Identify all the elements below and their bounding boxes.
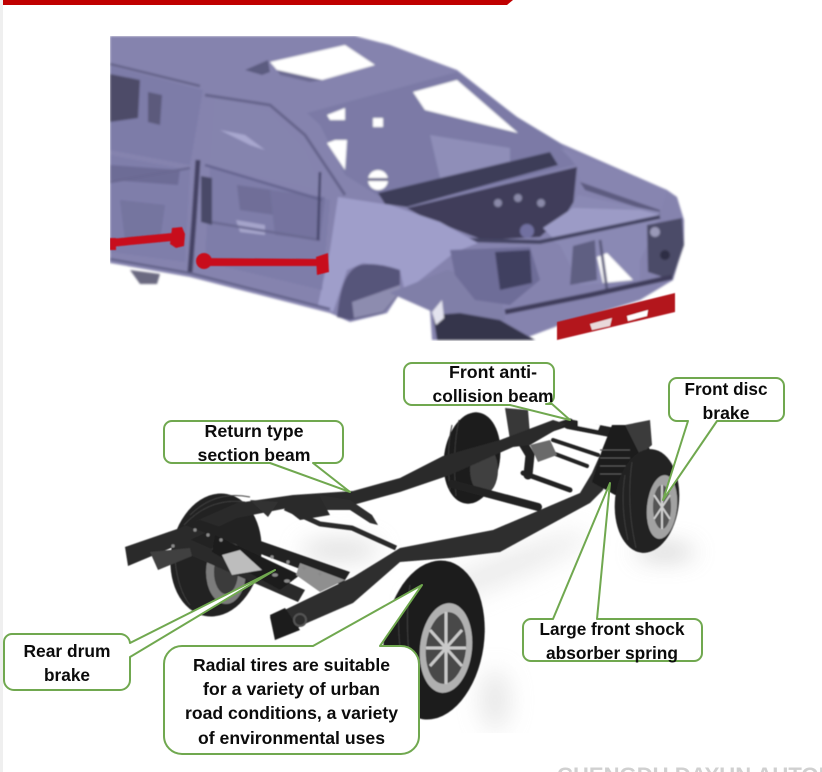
front radiator rail bbox=[465, 217, 660, 242]
callout: front disc brake: brake bbox=[702, 403, 750, 423]
front suspension and spring bbox=[592, 425, 650, 495]
callout: front disc brake: Front disc bbox=[684, 379, 768, 399]
left page edge bbox=[0, 0, 3, 772]
door panels bbox=[110, 155, 190, 262]
front end lower structure bbox=[392, 282, 432, 312]
callout: large front shock absorber spring: Large front shock bbox=[540, 619, 685, 639]
callout: rear drum brake: Rear drum bbox=[24, 641, 110, 661]
callout: radial tires: Radial tires are suitable bbox=[193, 655, 390, 675]
callout: large front shock absorber spring bbox=[523, 483, 702, 663]
rear spring arm bbox=[285, 508, 396, 548]
callout: front disc brake bbox=[663, 378, 784, 500]
sunroof opening bbox=[270, 45, 375, 80]
callout: radial tires: for a variety of urban bbox=[203, 679, 380, 699]
bumper slots bbox=[578, 420, 600, 430]
floor shadows bbox=[464, 534, 575, 594]
callout: radial tires: of environmental uses bbox=[198, 728, 385, 748]
front cross members bbox=[452, 422, 615, 507]
callout: front anti-collision beam bbox=[404, 362, 570, 420]
callout: large front shock absorber spring: absorber spring bbox=[546, 643, 678, 663]
far rear wheel bbox=[170, 492, 262, 618]
side impact beams bbox=[110, 227, 329, 275]
callout: rear drum brake bbox=[4, 570, 275, 690]
engine bay firewall bbox=[407, 167, 577, 240]
far frame rail bbox=[125, 420, 566, 566]
header red banner bbox=[3, 0, 513, 5]
chassis photograph bbox=[125, 408, 695, 730]
wheel arch bbox=[337, 264, 400, 320]
callout: radial tires bbox=[164, 585, 422, 754]
far front wheel bbox=[443, 411, 502, 505]
hood fender band bbox=[560, 148, 667, 215]
firewall dark band bbox=[378, 152, 558, 207]
callout: radial tires: road conditions, a variety bbox=[185, 703, 398, 723]
engine bay shelf bbox=[568, 202, 660, 216]
callout: front anti-collision beam: collision beam bbox=[432, 386, 554, 406]
door sill stub bbox=[130, 270, 160, 284]
callout: return type section beam bbox=[164, 421, 350, 492]
rear frame cross beams bbox=[226, 539, 350, 584]
callout: return type section beam: section beam bbox=[198, 445, 310, 465]
front anti-collision beam bbox=[557, 293, 675, 340]
near frame rail bbox=[270, 455, 612, 640]
door frame and windows bbox=[112, 72, 164, 126]
rear bracket bbox=[222, 550, 262, 575]
near front wheel bbox=[614, 448, 680, 554]
rear cabin interior bbox=[311, 74, 572, 194]
perforations bbox=[170, 528, 291, 584]
callout: return type section beam: Return type bbox=[204, 421, 304, 441]
body silhouette bbox=[110, 36, 684, 340]
front fender panel bbox=[318, 197, 478, 312]
callout: rear drum brake: brake bbox=[44, 665, 90, 685]
front grille cluster bbox=[647, 218, 684, 280]
callout: front anti-collision beam: Front anti- bbox=[449, 362, 537, 382]
car body-in-white illustration bbox=[110, 36, 684, 340]
door pillar bbox=[190, 160, 198, 272]
near rear wheel bbox=[382, 560, 486, 720]
